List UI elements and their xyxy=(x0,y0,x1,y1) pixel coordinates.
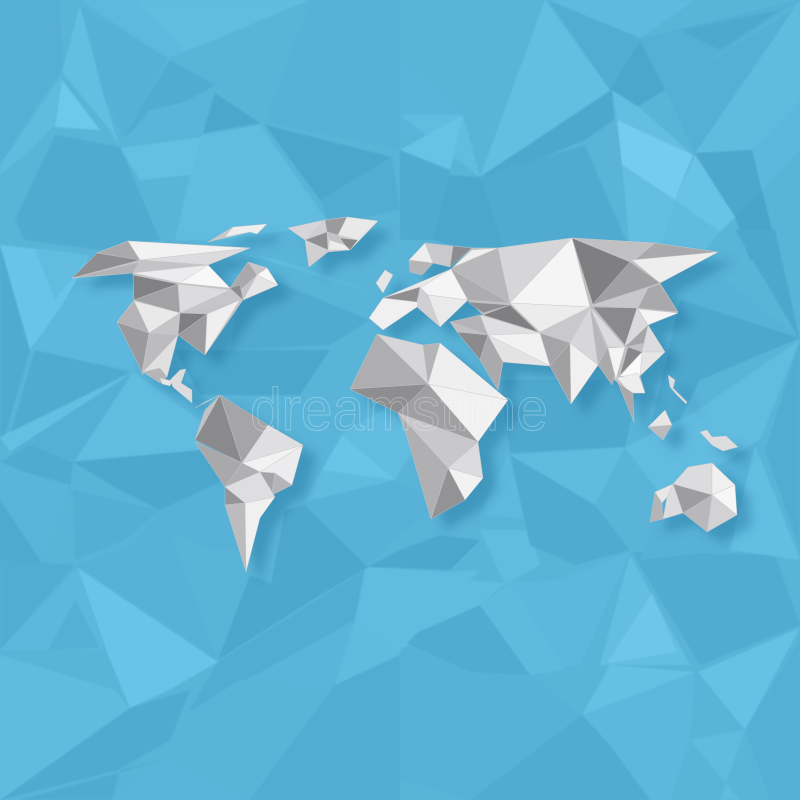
islands: Japan and Philippines xyxy=(668,375,687,404)
island: New Guinea xyxy=(700,430,738,451)
watermark text: dreamstime xyxy=(250,376,548,443)
island: Greenland xyxy=(288,217,378,267)
island: Arctic Canada xyxy=(208,224,267,242)
continent: Asia xyxy=(450,238,718,422)
continent: Australia xyxy=(650,463,737,532)
world map of folded paper continents xyxy=(72,217,738,572)
island: Borneo xyxy=(648,410,672,440)
continent: North America xyxy=(72,241,278,403)
continent: South America xyxy=(195,395,303,572)
continent: Africa xyxy=(350,334,508,519)
region: Europe xyxy=(369,243,472,330)
